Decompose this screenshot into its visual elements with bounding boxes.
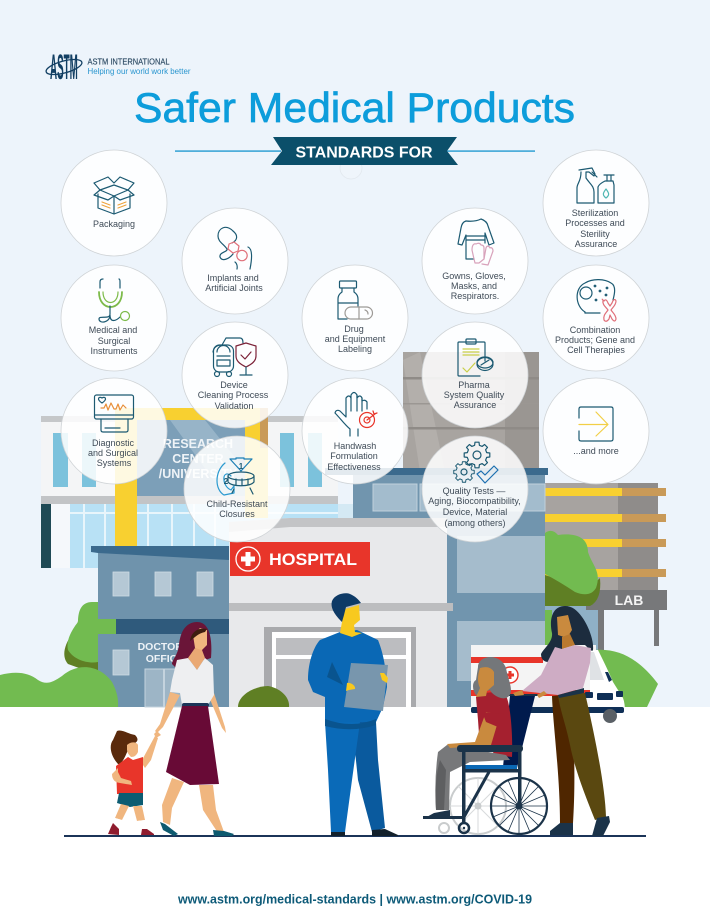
building: doctor's office bbox=[91, 546, 229, 707]
tree behind doctor's office bbox=[64, 602, 116, 672]
bushes bbox=[0, 667, 289, 707]
label: Device, Material bbox=[443, 507, 507, 517]
sign: hospital: HOSPITAL bbox=[269, 550, 357, 569]
label: (among others) bbox=[444, 518, 506, 528]
icon: hand and target bbox=[335, 392, 377, 436]
panel: medical instruments bbox=[61, 265, 167, 371]
building: lab bbox=[545, 483, 667, 663]
icon: bottle and pill bbox=[338, 281, 372, 319]
label: Cell Therapies bbox=[567, 345, 625, 355]
figure: child bbox=[108, 731, 161, 835]
label: Sterilization bbox=[572, 208, 618, 218]
ground line bbox=[64, 835, 646, 837]
label: Handwash bbox=[334, 441, 376, 451]
icon: closures bbox=[217, 458, 254, 495]
label: Drug bbox=[344, 324, 364, 334]
title: Safer Medical Products bbox=[134, 84, 575, 131]
logo: ASTM International bbox=[45, 49, 191, 87]
building: research center bbox=[41, 408, 340, 568]
label: Device bbox=[220, 380, 248, 390]
label: Formulation bbox=[330, 451, 378, 461]
label: and Surgical bbox=[88, 448, 138, 458]
icon: cell and chromosome bbox=[577, 280, 616, 321]
icon: box bbox=[94, 177, 134, 214]
icon: stethoscope bbox=[99, 279, 130, 322]
panel: diagnostic systems bbox=[61, 378, 167, 484]
icon: monitor bbox=[94, 395, 134, 432]
building: hospital front bbox=[226, 518, 453, 707]
icon: hip joint bbox=[218, 227, 252, 269]
logo: ASTM International: Helping our world work better bbox=[88, 66, 191, 76]
text: research center: CENTER bbox=[172, 452, 224, 466]
text: research center: /UNIVERSITY bbox=[159, 467, 238, 481]
panel: drug labeling bbox=[302, 265, 408, 371]
label: Respirators. bbox=[451, 291, 499, 301]
panel: sterilization bbox=[543, 150, 649, 256]
icon: gears and check bbox=[454, 442, 498, 483]
illustration: city buildings bbox=[0, 352, 667, 723]
panel: quality tests bbox=[422, 436, 528, 542]
label: Systems bbox=[97, 458, 132, 468]
panel: combination products bbox=[543, 265, 649, 371]
building: lab: LAB bbox=[615, 592, 643, 608]
ambulance bbox=[471, 645, 658, 723]
label: Implants and bbox=[207, 273, 259, 283]
label: System Quality bbox=[444, 390, 505, 400]
label: Diagnostic bbox=[92, 438, 135, 448]
footer links: www.astm.org/medical-standards | www.astm.org/COVID-19 bbox=[177, 892, 532, 906]
logo: ASTM International: ASTM bbox=[50, 49, 78, 87]
label: Child-Resistant bbox=[206, 499, 268, 509]
panel: child-resistant closures bbox=[184, 436, 290, 542]
text: research center: RESEARCH bbox=[163, 437, 233, 451]
label: Pharma bbox=[458, 380, 490, 390]
label: Instruments bbox=[90, 346, 138, 356]
panel: and more bbox=[543, 378, 649, 484]
figure: woman in wheelchair and wheelchair bbox=[423, 657, 547, 834]
label: Products; Gene and bbox=[555, 335, 635, 345]
panel: gowns bbox=[422, 208, 528, 314]
label: Validation bbox=[215, 401, 253, 411]
label: ...and more bbox=[573, 446, 619, 456]
building: gray tower bbox=[403, 352, 539, 472]
label: Effectiveness bbox=[327, 462, 381, 472]
panel: handwash bbox=[302, 378, 408, 484]
label: Surgical bbox=[98, 336, 130, 346]
icon: cart and shield bbox=[213, 338, 256, 376]
tree behind lab bbox=[545, 575, 600, 606]
sign: hospital bbox=[230, 542, 370, 576]
text: doctor's office: DOCTOR'S bbox=[138, 641, 192, 653]
text: doctor's office: OFFICE bbox=[146, 653, 184, 665]
label: Closures bbox=[219, 509, 255, 519]
label: Packaging bbox=[93, 219, 135, 229]
label: Quality Tests — bbox=[443, 486, 505, 496]
icon: gown and gloves bbox=[458, 219, 494, 265]
label: Cleaning Process bbox=[198, 390, 269, 400]
label: Gowns, Gloves, bbox=[442, 271, 506, 281]
figure: woman pushing wheelchair bbox=[513, 606, 610, 836]
icon: clipboard and pill bbox=[458, 339, 493, 376]
label: Masks, and bbox=[451, 281, 497, 291]
icon: closures: 2 bbox=[224, 477, 229, 486]
label: Aging, Biocompatibility, bbox=[428, 496, 521, 506]
label: Medical and bbox=[89, 325, 137, 335]
figure: woman in burgundy skirt bbox=[155, 622, 234, 836]
figure: man with clipboard bbox=[308, 593, 398, 836]
building: hospital blue wing bbox=[325, 468, 548, 707]
panel: packaging bbox=[61, 150, 167, 256]
panel: pharma quality bbox=[422, 322, 528, 428]
panel: device cleaning bbox=[182, 322, 288, 428]
label: and Equipment bbox=[325, 334, 386, 344]
label: Assurance bbox=[454, 400, 496, 410]
label: Assurance bbox=[575, 239, 617, 249]
logo: ASTM International: ASTM INTERNATIONAL bbox=[88, 56, 170, 66]
label: Combination bbox=[570, 325, 620, 335]
label: Artificial Joints bbox=[205, 283, 263, 293]
label: Processes and bbox=[565, 218, 625, 228]
icon: closures: 1 bbox=[239, 462, 244, 471]
banner: standards for bbox=[175, 137, 535, 165]
label: Sterility bbox=[580, 229, 610, 239]
icon: spray and pump bbox=[577, 168, 614, 203]
banner: standards for: STANDARDS FOR bbox=[296, 144, 433, 162]
icon: arrow box bbox=[579, 407, 613, 441]
panel: implants bbox=[182, 208, 288, 314]
label: Labeling bbox=[338, 344, 372, 354]
